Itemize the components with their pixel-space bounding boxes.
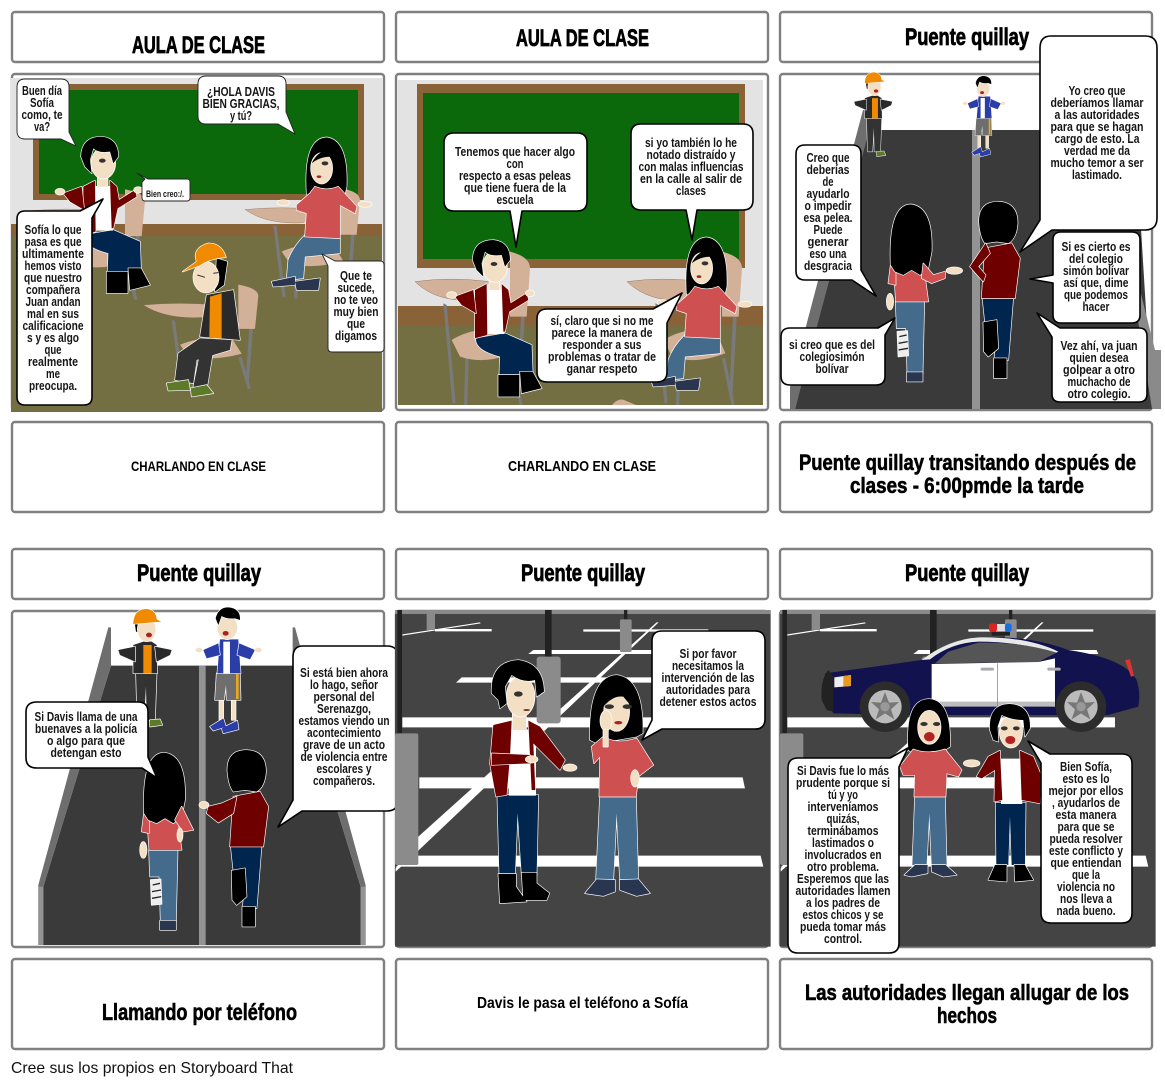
bubble: Creo que deberías: generar [808,235,849,249]
bubble: Sofía lo que pasa: mal en sus [27,307,79,321]
caption: panel 1 [12,422,384,512]
title: panel 3 [780,12,1152,62]
panel 2: classroom conversation [396,74,768,410]
bubble: Tenemos que hacer algo [444,133,587,247]
bubble: Si Davis fue: Esperemos que las [797,872,889,886]
bubble: Sofía lo que pasa: s y es algo [27,331,79,345]
bubble: Sofía lo que pasa: que [44,343,62,357]
panel 6: authorities arrive [780,610,1156,953]
bubble: Buen día [17,79,76,146]
bubble: Que te sucede: no te veo [334,293,378,307]
bubble: Si Davis llama: Si Davis llama de una [34,710,138,724]
bubble: Si Davis fue: control. [824,932,862,946]
bubble: Si es cierto: del colegio [1069,252,1123,266]
bubble: Si es cierto [1030,232,1140,323]
bubble: sí, claro: sí, claro que si no me [550,314,654,328]
bubble: Si Davis llama [26,702,157,778]
panel 4: phone call on the bridge [12,607,398,947]
title: panel 1: AULA DE CLASE [132,32,265,59]
bubble: Si es cierto: Si es cierto es [1062,240,1131,254]
bubble: Que te sucede [322,254,384,352]
bubble: Que te sucede: muy bien [334,305,378,319]
bubble: Yo creo que: Yo creo que [1068,84,1126,98]
title: panel 4 [12,549,384,599]
bubble: si creo que es del: si creo que es del [789,338,875,352]
bubble: Buen día: va? [34,120,50,134]
bubble: si yo también [631,124,753,240]
characters: Davis and Sofía [490,660,653,903]
bubble: Vez ahí: otro colegio. [1068,387,1130,401]
caption: panel 5 [396,959,768,1049]
bubble: si yo también: si yo también lo he [645,136,737,150]
bubble: Si es cierto: que podemos [1064,288,1128,302]
caption: panel 5: Davis le pasa el teléfono a Sofía [477,995,688,1012]
bubble: Vez ahí: golpear a otro [1063,363,1135,377]
bubble: Si por favor: necesitamos la [672,659,745,673]
title: panel 6 [780,549,1152,599]
bubble: Si por favor: detener estos actos [660,695,757,709]
bubble: Buen día: como, te [22,108,63,122]
bubble: Bien creo: Bien creo:/. [146,189,184,199]
bubble: Si por favor: Si por favor [680,647,737,661]
bubble: Sofía lo que pasa: hemos visto [24,259,82,273]
bubble: Sofía lo que pasa: me [46,367,60,381]
bubble: Si está bien ahora: lo hago, señor [310,678,378,692]
footer credit: Cree sus los propios en Storyboard That [11,1060,294,1077]
bubble: Creo que deberías [796,145,876,296]
bubble: Yo creo que: deberíamos llamar [1050,96,1144,110]
characters on bridge [854,72,1020,382]
title: panel 2: AULA DE CLASE [516,25,649,52]
bubble: Si está bien ahora: de violencia entre [300,750,388,764]
bubble: Bien Sofía: para que se [1058,820,1115,834]
caption: panel 4 [12,959,384,1049]
bubble: sí, claro: ganar respeto [566,362,638,376]
bubble: Buen día: Buen día [22,84,63,98]
bubble: Si por favor: autoridades para [666,683,751,697]
bubble: Bien creo [137,173,190,201]
bubble: Si Davis fue: lastimados o [812,836,874,850]
bubble: Si está bien ahora: Serenazgo, [317,702,371,716]
panel 5: parking lot [395,610,771,947]
bubble: Si Davis fue: Si Davis fue lo más [797,764,889,778]
bubble: sí, claro: responder a sus [562,338,642,352]
bubble: Bien Sofía: esto es lo [1062,772,1110,786]
bubble: Hola Davis [198,76,295,134]
bubble: si yo también: notado distraído y [646,148,736,162]
bubble: Bien Sofía: este conflicto y [1049,844,1123,858]
bubble: Vez ahí [1037,313,1147,402]
bubble: Bien Sofía: Bien Sofía, [1060,760,1112,774]
bubble: Sofía lo que pasa: ultimamente [22,247,84,261]
bubble: Sofía lo que pasa: compañera [26,283,81,297]
bubble: Si Davis fue: involucrados en [804,848,882,862]
bubble: Bien Sofía: que la [1072,868,1101,882]
title: panel 2 [396,12,768,62]
caption: panel 6: hechos [937,1003,997,1028]
bubble: si yo también: con malas influencias [638,160,744,174]
bubble: Que te sucede: sucede, [338,281,374,295]
bubble: Bien Sofía: nada bueno. [1056,904,1116,918]
bubble: Yo creo que: verdad me da [1064,144,1131,158]
bubble: Bien Sofía: pueda resolver [1050,832,1123,846]
bubble: si creo que es del: bolívar [816,362,849,376]
caption: panel 1: CHARLANDO EN CLASE [131,458,266,474]
bubble: Vez ahí: quien desea [1070,351,1129,365]
bubble: Si Davis fue: terminábamos [808,824,879,838]
title: panel 3: Puente quillay [905,24,1029,51]
police car [821,623,1139,732]
bubble: Creo que deberías: eso una [810,247,847,261]
bubble: Creo que deberías: Creo que [806,151,850,165]
bubble: Tenemos que hacer algo: Tenemos que hacer algo [455,145,575,159]
bubble: Si es cierto: simón bolívar [1063,264,1129,278]
bubble: Hola Davis: ¿HOLA DAVIS [207,85,275,99]
title: panel 5: Puente quillay [521,560,645,587]
chalkboard [33,84,364,200]
bubble: Bien Sofía: mejor por ellos [1048,784,1124,798]
bubble: Si Davis fue: a los padres de [806,896,880,910]
bubble: Creo que deberías: Puede [814,223,843,237]
bubble: Si está bien ahora [278,646,398,827]
bubble: Sofía lo que pasa: preocupa. [29,379,77,393]
bubble: Si Davis fue: autoridades llamen [796,884,890,898]
bubble: Sofía lo que pasa: Sofía lo que [24,223,82,237]
bubble: Creo que deberías: o impedir [804,199,852,213]
bubble: Bien Sofía: violencia no [1057,880,1115,894]
panel 3: bridge [780,36,1161,410]
bubble: sí, claro: problemas o tratar de [548,350,656,364]
bubble: Tenemos que hacer algo: escuela [496,193,534,207]
bubble: Si está bien ahora: estamos viendo un [298,714,390,728]
bubble: Creo que deberías: deberías [806,163,850,177]
bubble: Sofía lo que pasa: pasa es que [24,235,82,249]
panel 1: classroom [11,74,384,412]
bubble: Si Davis llama: buenaves a la policía [35,722,138,736]
bubble: si creo que es del [781,318,895,385]
caption: panel 6 [780,959,1152,1049]
caption: panel 3 [780,422,1152,512]
bubble: Sofía lo que pasa: que nuestro [24,271,82,285]
bubble: Yo creo que: mucho temor a ser [1050,156,1144,170]
title: panel 1 [12,12,384,62]
bubble: Si por favor: intervención de las [662,671,755,685]
bubble: Si es cierto: así que, dime [1064,276,1129,290]
bubble: Vez ahí: Vez ahí, va juan [1060,339,1138,353]
road [790,110,1161,409]
bubble: Yo creo que: para que se hagan [1050,120,1144,134]
bubble: sí, claro [537,293,682,382]
title: panel 4: Puente quillay [137,560,261,587]
bubble: Si está bien ahora: acontecimiento [307,726,381,740]
bubble: si yo también: clases [676,184,706,198]
bubble: Si es cierto: hacer [1082,300,1110,314]
bubble: Si Davis fue: prudente porque si [796,776,890,790]
bubble: Si está bien ahora: Si está bien ahora [300,666,389,680]
bubble: Sofía lo que pasa: realmente [28,355,78,369]
bubble: Bien Sofía [1028,741,1132,923]
characters in classroom [415,237,752,405]
bubble: Yo creo que: lastimado. [1072,168,1122,182]
bubble: Si está bien ahora: personal del [314,690,374,704]
bubble: Si Davis fue: estos chicos y se [802,908,884,922]
bubble: Bien Sofía: , ayudarlos de [1052,796,1120,810]
bubble: Si Davis fue: tú y yo [828,788,858,802]
bubble: Sofía lo que pasa: calificacione [22,319,84,333]
chalkboard [417,84,745,268]
bubble: Si Davis llama: o algo para que [47,734,125,748]
bubble: Hola Davis: y tú? [230,109,252,123]
characters in classroom [30,137,372,397]
bubble: Yo creo que: a las autoridades [1054,108,1140,122]
bubble: Creo que deberías: ayudarlo [806,187,850,201]
road [38,627,366,945]
caption: panel 2: CHARLANDO EN CLASE [508,458,656,475]
bubble: Tenemos que hacer algo: que tiene fuera de la [464,181,567,195]
caption: panel 4: Llamando por teléfono [102,999,297,1025]
bubble: Que te sucede: digamos [335,329,377,343]
characters: Sofía and Davis smiling [900,699,1042,882]
bubble: Buen día: Sofía [30,96,55,110]
bubble: Bien Sofía: nos lleva a [1060,892,1113,906]
bubble: Sofía lo que pasa: Juan andan [26,295,80,309]
caption: panel 3: clases - 6:00pmde la tarde [850,473,1084,498]
bubble: Si Davis fue: quizás, [826,812,860,826]
bubble: Yo creo que: cargo de esto. La [1054,132,1140,146]
bubble: Si Davis llama: detengan esto [50,746,122,760]
bubble: Creo que deberías: esa pelea. [804,211,852,225]
bubble: Vez ahí: muchacho de [1068,375,1131,389]
bubble: Si Davis fue [788,748,908,953]
bubble: Si está bien ahora: grave de un acto [303,738,385,752]
bubble: Si está bien ahora: escolares y [316,762,372,776]
bubble: Si Davis fue: interveníamos [808,800,879,814]
bubble: Tenemos que hacer algo: respecto a esas peleas [459,169,571,183]
bubble: Yo creo que [1020,36,1157,252]
bubble: Creo que deberías: de [822,175,834,189]
bubble: Bien Sofía: esta manera [1056,808,1117,822]
bubble: Que te sucede: Que te [340,269,372,283]
title: panel 5 [396,549,768,599]
bubble: Si Davis fue: otro problema. [807,860,879,874]
bubble: Tenemos que hacer algo: con [506,157,524,171]
bubble: si creo que es del: colegiosimón [800,350,864,364]
bubble: Si por favor [642,631,765,740]
caption: panel 2 [396,422,768,512]
bubble: Creo que deberías: desgracia [804,259,853,273]
bubble: Bien Sofía: que entiendan [1050,856,1122,870]
bubble: Hola Davis: BIEN GRACIAS, [202,97,280,111]
bubble: Si Davis fue: pueda tomar más [800,920,886,934]
bubble: si yo también: en la calle al salir de [640,172,742,186]
bubble: Sofía lo que pasa [17,199,103,405]
bubble: Si está bien ahora: compañeros. [313,774,375,788]
bubble: sí, claro: parece la manera de [552,326,653,340]
characters on bridge [118,607,268,930]
title: panel 6: Puente quillay [905,560,1029,587]
bubble: Que te sucede: que [347,317,365,331]
